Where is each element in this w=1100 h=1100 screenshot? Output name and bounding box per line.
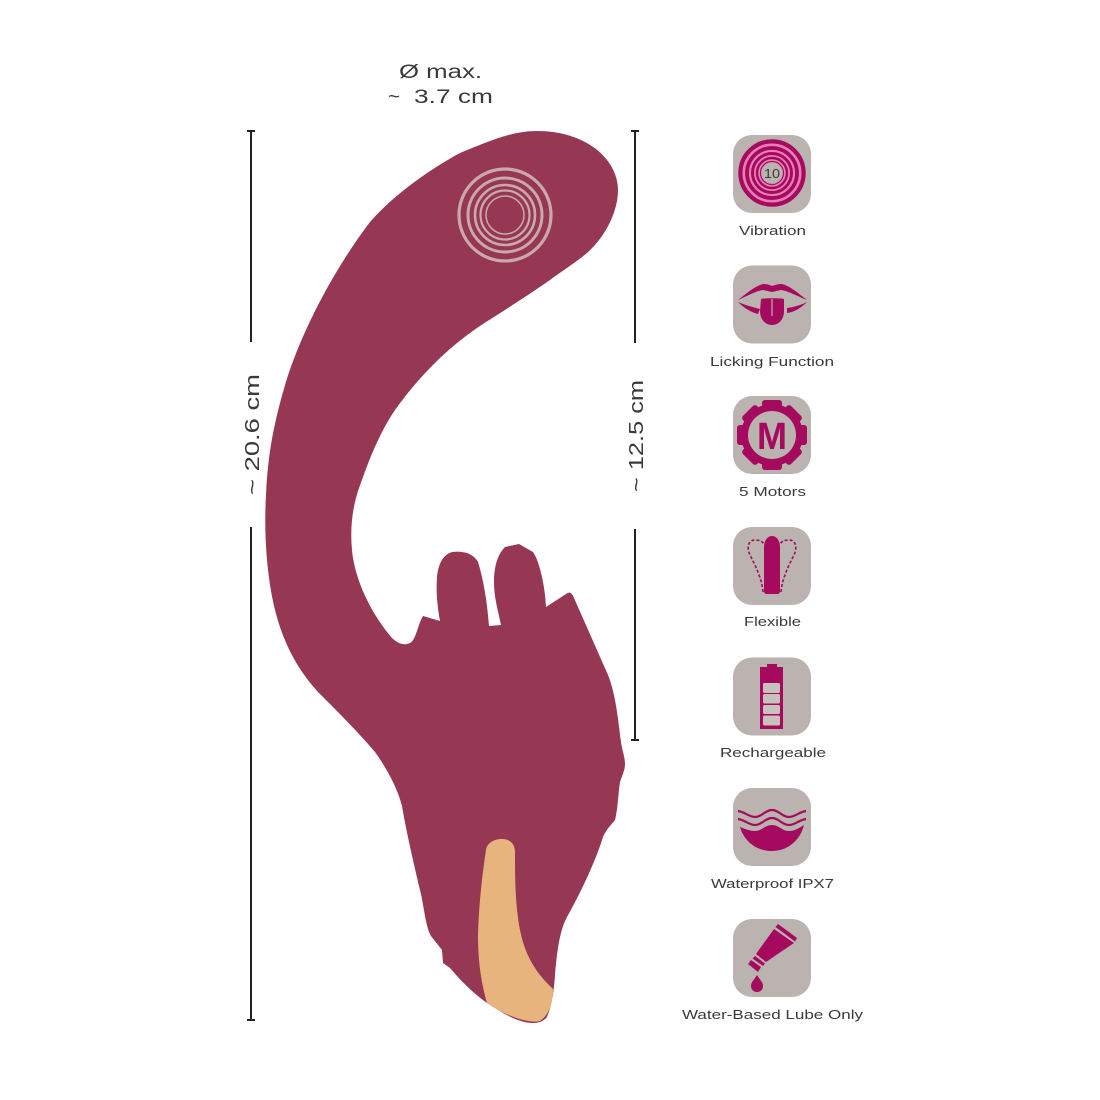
feature: water-based lube only: Water-Based Lube Only — [682, 1007, 864, 1022]
diameter label: 3.7 cm — [414, 87, 493, 108]
feature: licking function: Licking Function — [710, 354, 834, 369]
icon: lube tube and drop — [748, 924, 797, 992]
icon: battery — [760, 664, 783, 729]
feature: waterproof: Waterproof IPX7 — [711, 876, 834, 891]
feature: rechargeable: Rechargeable — [720, 745, 826, 760]
control button rings — [459, 169, 551, 261]
diameter label: ~ — [388, 87, 400, 108]
feature: water-based lube only — [682, 919, 864, 1022]
product silhouette — [265, 131, 625, 1023]
feature: flexible: Flexible — [744, 614, 801, 629]
feature: 5 motors: 5 Motors — [739, 484, 807, 499]
feature: waterproof — [711, 788, 834, 891]
diameter label — [388, 62, 493, 108]
icon: mouth and tongue — [738, 284, 807, 325]
feature: rechargeable — [720, 658, 826, 760]
feature: licking function — [710, 266, 834, 369]
icon: water waves in bowl — [738, 810, 806, 851]
icon: gear with M: M — [757, 416, 787, 458]
dimension label: upper arm length: ~ 12.5 cm — [626, 380, 648, 492]
icon: concentric vibration rings — [740, 141, 804, 205]
dimension line: upper arm length — [631, 131, 639, 740]
feature: vibration: Vibration — [739, 223, 806, 238]
feature: flexible — [733, 527, 811, 629]
feature: 5 motors — [733, 396, 811, 499]
dimension line: total length — [247, 131, 255, 1020]
dimension label: total length: ~ 20.6 cm — [242, 374, 264, 495]
diameter label: Ø max. — [399, 62, 482, 83]
feature: vibration: 10 — [764, 166, 780, 181]
tan handle accent — [478, 839, 553, 1022]
icon: flexing bar — [748, 536, 796, 594]
feature: vibration — [733, 135, 811, 238]
